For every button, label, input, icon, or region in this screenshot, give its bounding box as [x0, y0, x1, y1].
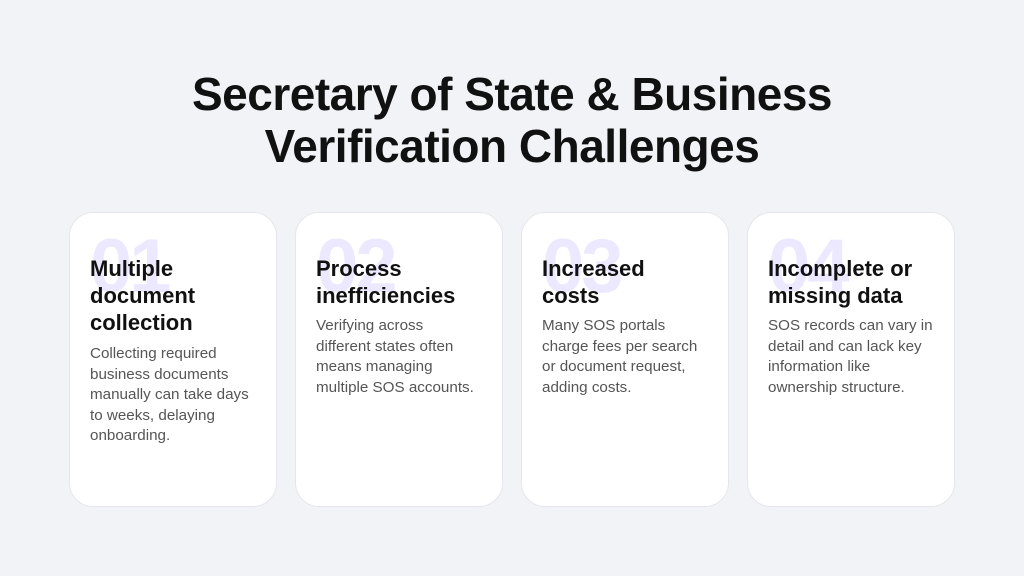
text 3: charge fees per search: [542, 338, 697, 354]
heading 4: Incomplete or: [768, 256, 912, 281]
heading 1: [90, 256, 195, 335]
number 02: 02: [316, 224, 395, 309]
text 1: to weeks, delaying: [90, 406, 215, 424]
text 4: ownership structure.: [768, 378, 905, 396]
text 1: business documents: [90, 366, 228, 382]
text 1: onboarding.: [90, 427, 170, 444]
text 4: detail and can lack key: [768, 338, 922, 354]
panel: card 1: [69, 212, 277, 507]
text 1: manually can take days: [90, 386, 249, 403]
text 3: Many SOS portals: [542, 317, 665, 334]
heading 2: Process: [316, 256, 402, 281]
panel: card 4: [747, 212, 955, 507]
heading 1: collection: [90, 310, 193, 335]
number 04: 04: [768, 224, 847, 309]
heading 4: [768, 256, 912, 308]
heading 4: missing data: [768, 283, 902, 308]
title: Secretary of State & Business: [192, 68, 832, 120]
text 1: Collecting required: [90, 345, 217, 362]
heading 2: [316, 256, 455, 308]
heading 1: document: [90, 283, 195, 308]
text 2: different states often: [316, 338, 453, 354]
text 3: [542, 317, 697, 396]
text 2: Verifying across: [316, 317, 423, 334]
heading 3: [542, 256, 645, 308]
title: Verification Challenges: [265, 120, 759, 172]
text 2: multiple SOS accounts.: [316, 378, 474, 396]
title: [192, 68, 832, 172]
text 4: information like: [768, 358, 870, 375]
heading 2: inefficiencies: [316, 283, 455, 308]
heading 1: Multiple: [90, 256, 173, 281]
panel: card 2: [295, 212, 503, 507]
text 3: or document request,: [542, 358, 686, 375]
panel: card 3: [521, 212, 729, 507]
text 2: means managing: [316, 358, 433, 375]
text 1: [90, 345, 249, 444]
text 2: [316, 317, 474, 396]
heading 3: costs: [542, 283, 599, 308]
text 4: [768, 317, 933, 396]
text 4: SOS records can vary in: [768, 317, 933, 334]
text 3: adding costs.: [542, 378, 632, 396]
heading 3: Increased: [542, 256, 645, 281]
number 01: 01: [90, 224, 169, 309]
number 03: 03: [542, 224, 621, 309]
